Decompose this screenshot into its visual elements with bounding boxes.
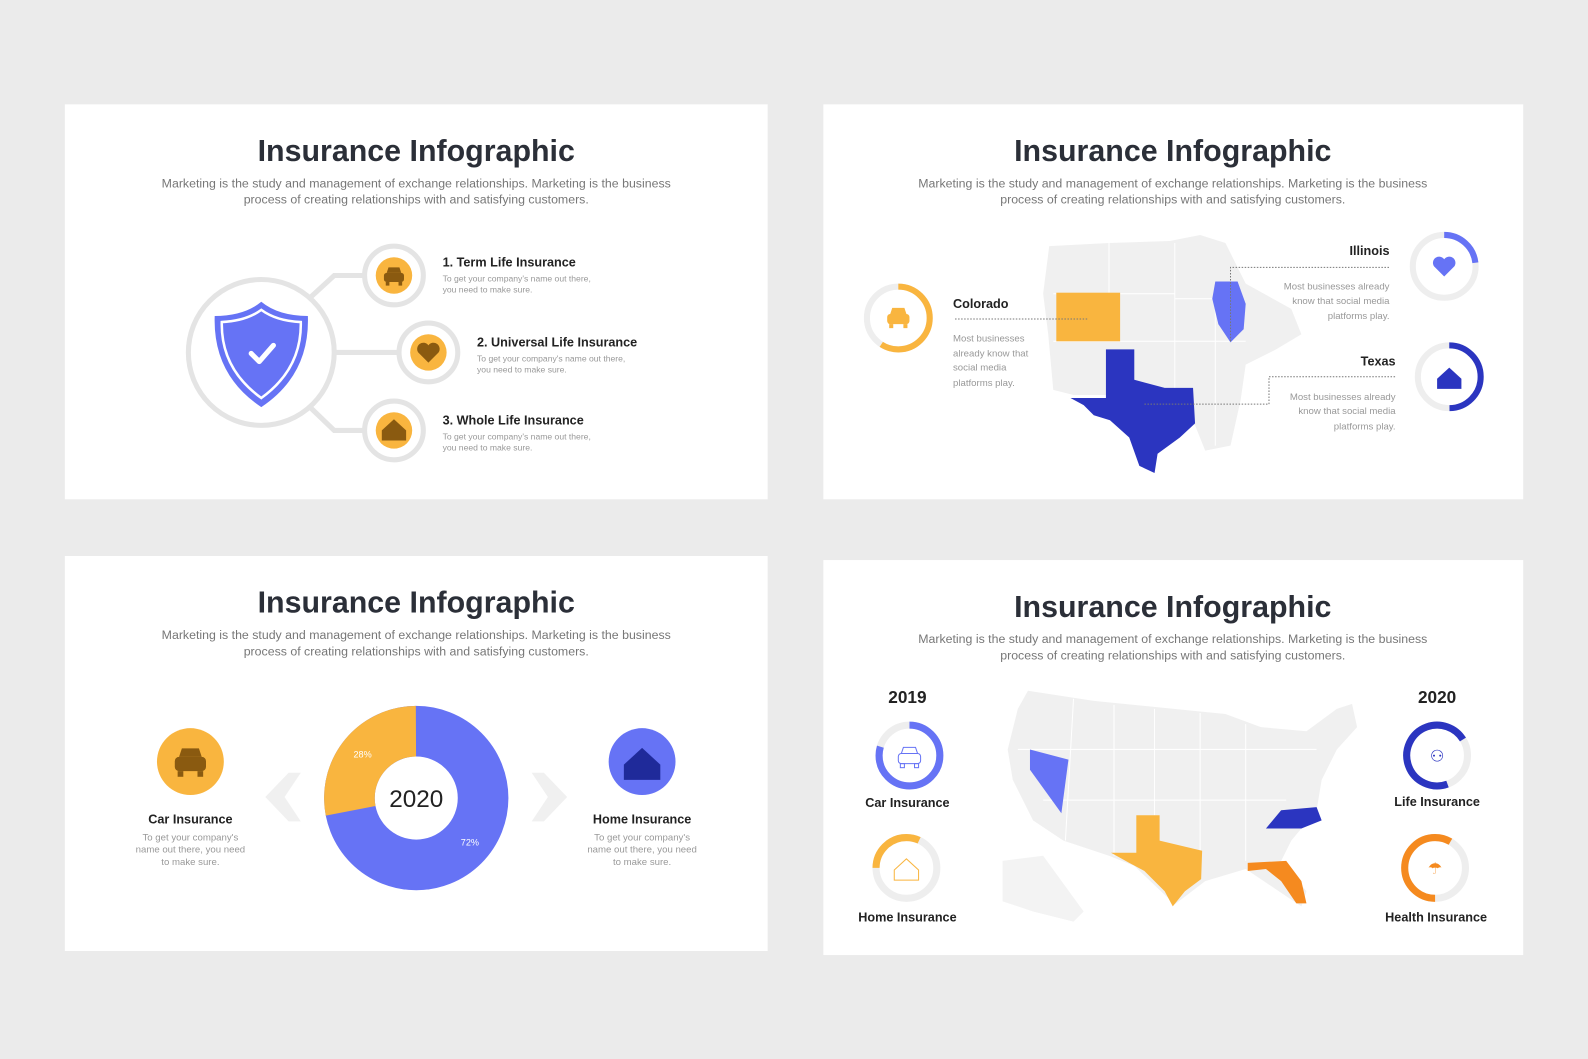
title: Insurance Infographic xyxy=(1014,590,1331,624)
colorado text: social media xyxy=(953,363,1007,374)
subtitle: process of creating relationships with and satisfying customers. xyxy=(244,193,589,207)
item 1 xyxy=(443,255,591,295)
illinois text: platforms play. xyxy=(1328,311,1390,322)
panel: term life insurance xyxy=(65,104,768,499)
donut: 72% xyxy=(461,838,479,848)
item 1: 1. Term Life Insurance xyxy=(443,255,576,269)
home insurance: Home Insurance xyxy=(593,812,691,826)
home insurance: To get your company's xyxy=(594,833,690,844)
ring: texas xyxy=(1418,345,1481,408)
texas text xyxy=(1290,355,1396,432)
panel: us map xyxy=(823,560,1523,955)
ring: life insurance: Life Insurance xyxy=(1394,795,1480,809)
subtitle: process of creating relationships with and satisfying customers. xyxy=(1000,193,1345,207)
icon: house xyxy=(365,401,423,460)
icon: car xyxy=(365,246,423,305)
subtitle: process of creating relationships with and satisfying customers. xyxy=(1000,648,1345,662)
item 3: you need to make sure. xyxy=(443,443,532,453)
year 2019: 2019 xyxy=(888,687,927,707)
ring: home insurance xyxy=(858,838,957,925)
texas text: platforms play. xyxy=(1334,421,1396,432)
title: Insurance Infographic xyxy=(258,134,575,168)
item 3: 3. Whole Life Insurance xyxy=(443,413,584,427)
panel: state map xyxy=(823,104,1523,499)
colorado text xyxy=(953,297,1029,389)
illinois text: know that social media xyxy=(1292,296,1390,307)
colorado text: platforms play. xyxy=(953,378,1015,389)
item 1: To get your company's name out there, xyxy=(443,274,591,284)
ring: health insurance xyxy=(1385,838,1487,925)
texas text: Texas xyxy=(1361,355,1396,369)
connectors xyxy=(309,275,398,430)
leader lines xyxy=(955,267,1396,404)
illinois text xyxy=(1284,244,1390,322)
home insurance xyxy=(587,728,697,868)
subtitle: Marketing is the study and management of exchange relationships. Marketing is the business xyxy=(162,628,671,642)
ring: car insurance: Car Insurance xyxy=(865,796,950,810)
shield xyxy=(188,280,334,425)
item 1: you need to make sure. xyxy=(443,285,532,295)
ring: health insurance: ☂ xyxy=(1428,859,1442,878)
panel: donut chart xyxy=(65,556,768,951)
ring: life insurance xyxy=(1394,717,1480,809)
illinois text: Illinois xyxy=(1349,244,1390,258)
car insurance: to make sure. xyxy=(161,857,220,868)
colorado text: already know that xyxy=(953,348,1029,359)
ring: illinois xyxy=(1413,235,1476,298)
home insurance: name out there, you need xyxy=(587,845,697,856)
texas text: Most businesses already xyxy=(1290,392,1396,403)
car insurance: To get your company's xyxy=(142,833,238,844)
ring: life insurance: ⚇ xyxy=(1430,747,1444,766)
illinois text: Most businesses already xyxy=(1284,282,1390,293)
icon: heart xyxy=(399,323,458,382)
car insurance: name out there, you need xyxy=(136,845,245,856)
map xyxy=(1043,235,1301,473)
car insurance xyxy=(136,728,245,868)
item 2 xyxy=(477,335,637,375)
ring: colorado xyxy=(867,287,930,349)
ring: health insurance: Health Insurance xyxy=(1385,911,1487,925)
colorado text: Most businesses xyxy=(953,333,1025,344)
donut: 28% xyxy=(353,750,372,760)
subtitle: Marketing is the study and management of exchange relationships. Marketing is the business xyxy=(162,176,671,190)
item 3 xyxy=(443,413,591,453)
ring: car insurance xyxy=(865,725,950,810)
subtitle: Marketing is the study and management of exchange relationships. Marketing is the business xyxy=(918,176,1427,190)
item 2: you need to make sure. xyxy=(477,365,567,375)
title: Insurance Infographic xyxy=(258,586,575,620)
colorado text: Colorado xyxy=(953,297,1009,311)
title: Insurance Infographic xyxy=(1014,134,1331,168)
donut xyxy=(338,720,495,876)
map xyxy=(1003,691,1357,922)
ring: home insurance: Home Insurance xyxy=(858,911,957,925)
arrows xyxy=(265,773,567,821)
item 2: 2. Universal Life Insurance xyxy=(477,335,637,349)
item 2: To get your company's name out there, xyxy=(477,354,625,364)
car insurance: Car Insurance xyxy=(148,812,233,826)
texas text: know that social media xyxy=(1298,406,1396,417)
subtitle: Marketing is the study and management of exchange relationships. Marketing is the business xyxy=(918,632,1427,646)
subtitle: process of creating relationships with and satisfying customers. xyxy=(244,644,589,658)
donut: 2020 xyxy=(389,786,443,813)
item 3: To get your company's name out there, xyxy=(443,432,591,442)
home insurance: to make sure. xyxy=(613,857,671,868)
year 2020: 2020 xyxy=(1418,687,1456,707)
